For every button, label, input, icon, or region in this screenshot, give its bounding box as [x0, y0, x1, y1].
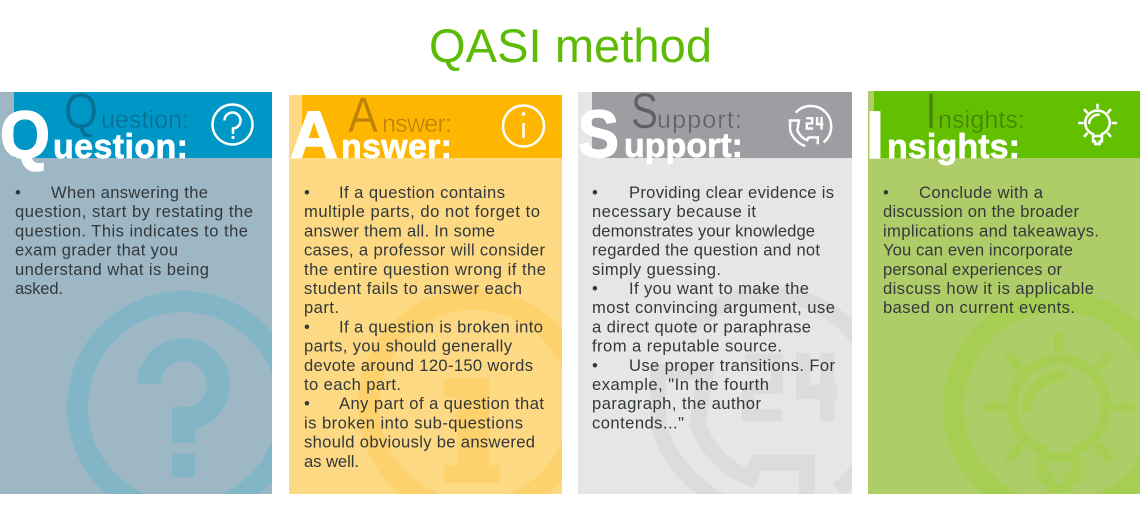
support bold heading — [578, 97, 743, 172]
support body text: • — [592, 279, 598, 298]
title: QASI method — [429, 19, 712, 72]
insights body text: Conclude with a — [919, 183, 1044, 202]
support body text: simply guessing. — [592, 260, 721, 279]
answer body text: If a question contains — [339, 183, 505, 202]
question bold heading — [0, 98, 188, 173]
support body text: a direct quote or paraphrase — [592, 317, 811, 336]
answer body text: to each part. — [304, 375, 401, 394]
support bold heading: S — [578, 97, 619, 172]
support body text: • — [592, 183, 598, 202]
answer bold heading — [290, 98, 452, 173]
answer bold heading: nswer: — [341, 128, 452, 166]
answer body text: If a question is broken into — [339, 317, 543, 336]
answer light heading — [348, 87, 452, 143]
answer body text: answer them all. In some — [304, 221, 495, 240]
insights body text — [883, 183, 1099, 317]
question body text: question. This indicates to the — [15, 221, 248, 240]
question bold heading: uestion: — [53, 128, 188, 166]
support body text: paragraph, the author — [592, 394, 761, 413]
panel: question — [0, 92, 272, 494]
insights body text: personal experiences or — [883, 260, 1062, 279]
support panel background — [578, 92, 852, 494]
answer body text: • — [304, 317, 310, 336]
answer header band — [302, 95, 562, 158]
insights panel background — [868, 91, 1140, 494]
question light heading: Q — [64, 83, 98, 139]
support body text: contends..." — [592, 413, 684, 432]
answer body text: part. — [304, 298, 339, 317]
support body text: most convincing argument, use — [592, 298, 835, 317]
icon: question mark in circle — [212, 104, 252, 144]
insights light heading: I — [926, 83, 936, 139]
icon: light bulb — [1079, 105, 1116, 144]
icon: 24-hour phone — [789, 106, 831, 146]
support body text: Providing clear evidence is — [629, 183, 834, 202]
icon: large info watermark — [368, 300, 580, 510]
support body text: regarded the question and not — [592, 241, 820, 260]
answer body text: should obviously be answered — [304, 433, 535, 452]
panel: support — [578, 92, 852, 494]
support header band — [592, 92, 852, 158]
insights header band — [874, 91, 1140, 158]
icon: large 24-hour phone watermark — [650, 286, 852, 494]
question body text: understand what is being — [15, 260, 209, 279]
question body text: asked. — [15, 279, 63, 298]
question panel background — [0, 92, 272, 494]
answer body text: Any part of a question that — [339, 394, 544, 413]
insights bold heading — [866, 98, 1020, 173]
support body text: demonstrates your knowledge — [592, 221, 815, 240]
answer body text: as well. — [304, 452, 359, 471]
icon: large light bulb watermark — [954, 302, 1140, 512]
support light heading: S — [631, 83, 658, 139]
answer body text: • — [304, 394, 310, 413]
support body text — [592, 183, 835, 432]
answer body text — [304, 183, 546, 471]
question header band — [14, 92, 272, 158]
answer body text: devote around 120-150 words — [304, 356, 533, 375]
answer body text: cases, a professor will consider — [304, 241, 545, 260]
support body text: If you want to make the — [629, 279, 809, 298]
support light heading: upport: — [657, 106, 742, 134]
insights body text: discussion on the broader — [883, 202, 1079, 221]
icon: large question mark watermark — [78, 302, 288, 512]
support body text: • — [592, 356, 598, 375]
support bold heading: upport: — [624, 127, 743, 165]
answer light heading: nswer: — [382, 110, 452, 138]
insights body text: • — [883, 183, 889, 202]
insights bold heading: I — [866, 98, 884, 173]
insights body text: You can even incorporate — [883, 241, 1073, 260]
answer light heading: A — [348, 87, 379, 143]
insights body text: discuss how it is applicable — [883, 279, 1094, 298]
answer body text: student fails to answer each — [304, 279, 522, 298]
insights body text: based on current events. — [883, 298, 1075, 317]
answer body text: parts, you should generally — [304, 337, 513, 356]
insights light heading — [926, 83, 1025, 139]
answer panel background — [289, 95, 562, 494]
question light heading: uestion: — [101, 106, 189, 134]
question body text: When answering the — [51, 183, 208, 202]
insights bold heading: nsights: — [887, 128, 1020, 166]
panel: answer — [289, 95, 562, 494]
panel: insights — [866, 83, 1140, 512]
answer body text: is broken into sub-questions — [304, 413, 523, 432]
insights body text: implications and takeaways. — [883, 221, 1099, 240]
question bold heading: Q — [0, 98, 50, 173]
answer body text: multiple parts, do not forget to — [304, 202, 540, 221]
support body text: necessary because it — [592, 202, 756, 221]
icon: info in circle — [503, 106, 544, 146]
question body text: • — [15, 183, 21, 202]
support light heading — [631, 83, 742, 139]
answer body text: • — [304, 183, 310, 202]
support body text: example, "In the fourth — [592, 375, 769, 394]
support body text: from a reputable source. — [592, 337, 782, 356]
insights light heading: nsights: — [938, 106, 1025, 134]
answer bold heading: A — [290, 98, 338, 173]
question light heading — [64, 83, 189, 139]
question body text: question, start by restating the — [15, 202, 253, 221]
answer body text: the entire question wrong if the — [304, 260, 546, 279]
question body text — [15, 183, 253, 298]
question body text: exam grader that you — [15, 241, 178, 260]
support body text: Use proper transitions. For — [629, 356, 835, 375]
